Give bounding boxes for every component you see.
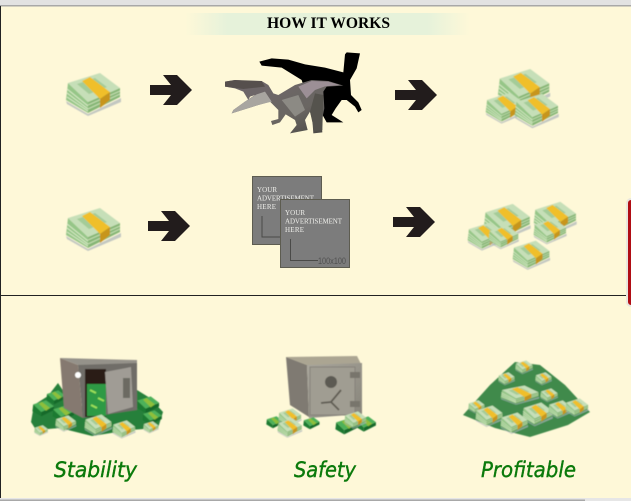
banner placeholder: back — [252, 176, 322, 244]
icon: single cash bundle, row one — [66, 73, 121, 116]
arrow: row two left — [148, 211, 190, 241]
icon: large money heap — [463, 360, 590, 437]
heading — [185, 13, 470, 35]
banner placeholder: front: 100x100 — [318, 256, 346, 266]
icon: scattered cash piles — [468, 202, 577, 270]
dinosaur silhouette — [259, 52, 362, 122]
banner placeholder: back: YOUR — [257, 186, 277, 194]
side tab — [627, 199, 631, 306]
banner placeholder: front — [280, 200, 350, 268]
banner placeholder: front: HERE — [285, 226, 304, 234]
label: Safety: Safety — [294, 458, 357, 482]
icon: cash stack — [486, 69, 559, 128]
arrow: row one left — [150, 75, 192, 105]
banner placeholder: front: YOUR — [285, 209, 305, 217]
label: Stability: Stability — [54, 458, 138, 482]
divider — [0, 295, 626, 296]
money heap behind — [31, 383, 163, 436]
label: Profitable: Profitable — [481, 458, 576, 482]
arrow: row one right — [395, 80, 437, 110]
icon: closed safe with money — [266, 356, 376, 438]
safe — [60, 358, 83, 418]
banner placeholder: back: HERE — [257, 203, 276, 211]
icon: open safe with money — [31, 358, 163, 438]
heading: HOW IT WORKS — [267, 15, 390, 32]
arrow: row two right — [393, 207, 435, 237]
banner placeholder: front: ADVERTISEMENT — [285, 218, 343, 226]
banner placeholder: back: ADVERTISEMENT — [257, 194, 315, 202]
illustration: dinosaurs — [225, 52, 362, 133]
money in front — [84, 414, 112, 436]
grey dinosaur — [225, 80, 343, 133]
icon: single cash bundle, row two — [66, 208, 121, 251]
